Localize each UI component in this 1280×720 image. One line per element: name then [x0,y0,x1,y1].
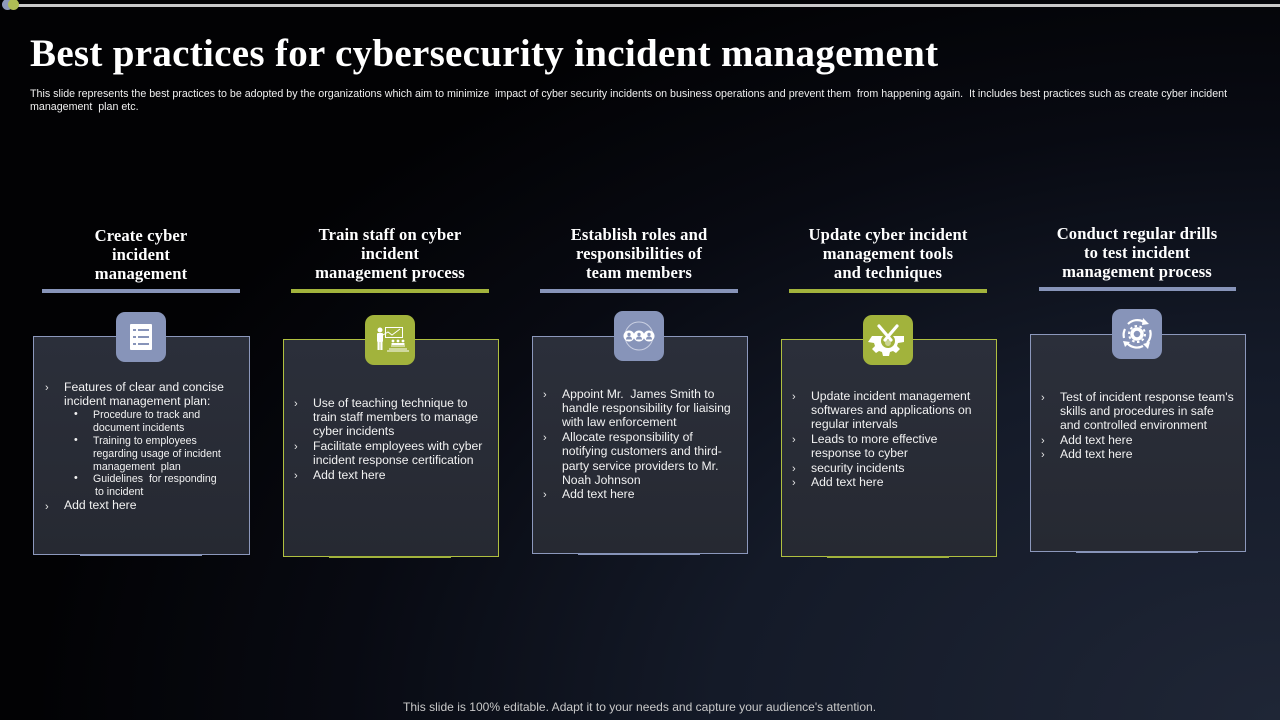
heading: update tools [808,225,968,282]
bullet list 2: Add text here [313,468,386,482]
heading: conduct drills: management process [1062,262,1212,281]
panel: establish roles [532,336,748,554]
bullet list 4: security incidents [811,461,904,475]
heading: conduct drills [1057,224,1217,281]
icon: team circle [614,311,664,361]
heading underline 4 [789,289,987,293]
heading: train staff: incident [361,244,419,263]
bullet list 3: Appoint Mr. James Smith to [562,387,714,401]
bullet list 3: Add text here [562,487,634,501]
icon: gear with tools [863,315,913,365]
bullet list 1: • [74,472,78,484]
heading underline 1 [42,289,240,293]
bullet list 4: softwares and applications on [811,403,972,417]
bullet list 4: › [792,477,796,489]
heading: create cyber incident management [95,226,188,283]
bullet list 1: • [74,434,78,446]
heading: establish roles [571,225,708,282]
heading: create cyber incident management: Create cyber [95,226,187,245]
top rule with dots [2,0,1280,10]
bullet list 3: › [543,489,547,501]
heading: train staff: Train staff on cyber [319,225,461,244]
bullet list 3: with law enforcement [562,415,676,429]
bullet list 5: › [1041,449,1045,461]
description: management plan etc. [30,101,139,113]
bullet list 3: › [543,432,547,444]
bullet list 5: skills and procedures in safe [1060,404,1214,418]
bullet list 2: › [294,398,298,410]
bullet list 1: to incident [95,486,143,498]
bullet list 1: Procedure to track and [93,409,200,421]
bullet list 3: Noah Johnson [562,473,641,487]
panel accent 4 [827,556,949,558]
bullet list 5: Test of incident response team's [1060,390,1234,404]
bullet list 2: cyber incidents [313,424,394,438]
heading: establish roles: team members [586,263,692,282]
panel accent 3 [578,553,700,555]
bullet list 4: Update incident management [811,389,970,403]
heading: conduct drills: to test incident [1084,243,1190,262]
bullet list 2: Use of teaching technique to [313,396,467,410]
panel: create cyber incident management [33,336,250,555]
bullet list 4: response to cyber [811,446,908,460]
bullet list 4: › [792,463,796,475]
bullet list 3: party service providers to Mr. [562,459,718,473]
description: This slide represents the best practices to be adopted by the organizations which aim to minimize impact of cyber security incidents on business operations and prevent them from happening again. It includes best practices such as create cyber incident [30,88,1227,100]
heading underline 5 [1039,287,1236,291]
bullet list 1: › [45,382,49,394]
bullet list 5: Add text here [1060,447,1132,461]
bullet list 1: management plan [93,461,181,473]
heading underline 2 [291,289,489,293]
bullet list 1: • [74,408,78,420]
bullet list 4: Add text here [811,475,884,489]
bullet list 1: Training to employees [93,435,197,447]
bullet list 2: train staff members to manage [313,410,478,424]
panel: update tools [781,339,997,557]
heading underline 3 [540,289,738,293]
bullet list 2: › [294,441,298,453]
bullet list 5 [1041,390,1234,461]
heading: train staff [315,225,465,282]
panel: conduct drills [1030,334,1246,552]
heading: update tools: Update cyber incident [809,225,967,244]
panel accent 2 [329,556,451,558]
bullet list 1: regarding usage of incident [93,448,221,460]
bullet list 3: › [543,389,547,401]
bullet list 4: Leads to more effective [811,432,937,446]
bullet list 5: and controlled environment [1060,418,1207,432]
heading: update tools: management tools [823,244,953,263]
heading: update tools: and techniques [834,263,942,282]
panel accent 1 [80,554,202,556]
bullet list 1 [45,380,224,513]
title: Best practices for cybersecurity incident management [30,32,938,75]
bullet list 5: › [1041,392,1045,404]
heading: conduct drills: Conduct regular drills [1057,224,1217,243]
bullet list 1: › [45,501,49,513]
footer note: This slide is 100% editable. Adapt it to your needs and capture your audience's attention. [403,700,876,714]
bullet list 1: Guidelines for responding [93,473,217,485]
bullet list 2: incident response certification [313,453,474,467]
bullet list 2: Facilitate employees with cyber [313,439,482,453]
bullet list 5: › [1041,435,1045,447]
panel accent 5 [1076,551,1198,553]
bullet list 5: Add text here [1060,433,1132,447]
icon: gear cycle [1112,309,1162,359]
bullet list 4: › [792,391,796,403]
bullet list 4: › [792,434,796,446]
heading: create cyber incident management: incident [112,245,170,264]
heading: establish roles: responsibilities of [576,244,702,263]
heading: train staff: management process [315,263,465,282]
panel: train staff [283,339,499,557]
bullet list 1: incident management plan: [64,394,210,408]
bullet list 1: Features of clear and concise [64,380,224,394]
bullet list 4 [792,389,972,489]
heading: create cyber incident management: management [95,264,187,283]
bullet list 1: document incidents [93,422,184,434]
bullet list 1: Add text here [64,498,136,512]
bullet list 3: handle responsibility for liaising [562,401,731,415]
heading: establish roles: Establish roles and [571,225,707,244]
bullet list 2: › [294,470,298,482]
bullet list 4: regular intervals [811,417,898,431]
bullet list 3 [543,387,731,501]
bullet list 2 [294,396,482,482]
bullet list 3: Allocate responsibility of [562,430,693,444]
icon: checklist [116,312,166,362]
bullet list 3: notifying customers and third- [562,444,722,458]
icon: trainer at board [365,315,415,365]
description [30,88,1228,113]
